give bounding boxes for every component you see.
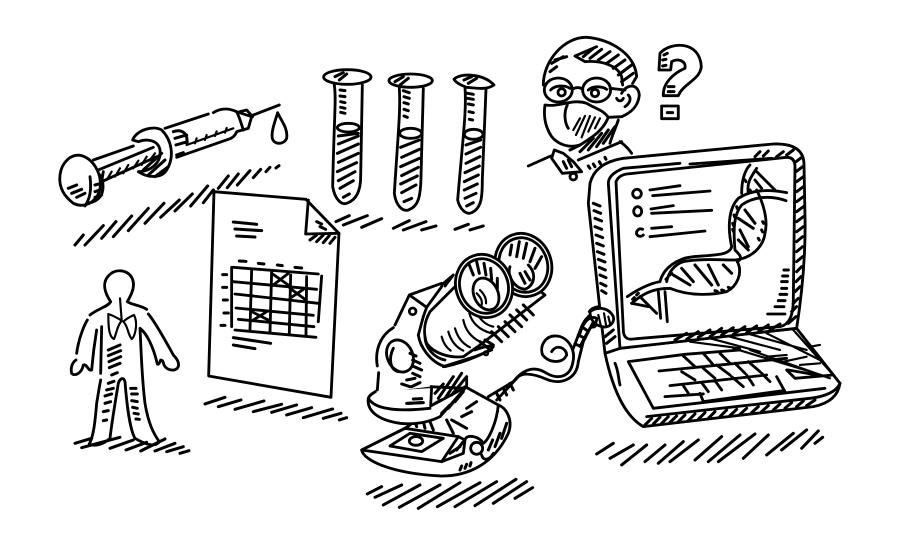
- icon: water drop: [272, 113, 287, 143]
- icon: human body with lungs: [71, 271, 189, 453]
- table grid: [232, 267, 322, 337]
- panel: medical document: [205, 192, 347, 420]
- syringe shadow: [75, 166, 279, 245]
- test tube shadow: [336, 216, 483, 230]
- syringe plunger rod: [93, 146, 157, 182]
- icon: question mark: [659, 45, 701, 119]
- laptop hinge hatching: [690, 330, 833, 378]
- syringe flange: [133, 128, 171, 176]
- document shadow: [205, 397, 347, 420]
- person shadow: [75, 437, 189, 453]
- panel: laptop: [580, 144, 840, 465]
- microscope body and tube, zoomed coordinates: [376, 225, 561, 406]
- icon: doctor with mask: [528, 37, 639, 180]
- person outline: [71, 271, 179, 445]
- cable clamp on laptop: [590, 308, 614, 327]
- syringe barrel: [165, 109, 252, 157]
- screen list: [633, 186, 712, 237]
- test tube 3: [454, 75, 494, 213]
- test tube 2: [389, 74, 432, 210]
- doctor hair: [543, 37, 637, 85]
- laptop shadow: [597, 430, 823, 465]
- laptop bezel hatching: [593, 150, 803, 343]
- microscope base: [362, 387, 510, 476]
- doctor mask: [544, 102, 608, 146]
- microscope focus knob: [381, 336, 419, 376]
- laptop screen: [616, 157, 795, 339]
- syringe needle: [253, 105, 279, 115]
- document fold: [306, 200, 339, 234]
- laptop keyboard: [628, 330, 833, 408]
- test tube 1: [324, 70, 371, 204]
- microscope collar: [418, 335, 493, 367]
- doctor glasses and eyes: [544, 78, 572, 102]
- laptop front hatching: [645, 400, 815, 425]
- screen DNA helix: [627, 165, 788, 322]
- microscope shadow: [367, 479, 533, 508]
- syringe plunger head: [60, 155, 100, 205]
- doctor ear: [608, 86, 639, 117]
- microscope foot: [368, 387, 465, 424]
- icon: microscope: [362, 225, 610, 508]
- icon: syringe: [60, 105, 279, 245]
- cable clamp: [588, 306, 610, 327]
- microscope neck hatching: [431, 378, 467, 406]
- table ticks: [221, 261, 302, 325]
- microscope cable: [488, 315, 596, 400]
- microscope tube hatching: [442, 313, 493, 351]
- doctor neck and collar: [528, 120, 632, 166]
- icon: test tubes: [324, 70, 494, 230]
- document sheet: [209, 192, 339, 397]
- right eyepiece: [486, 225, 561, 305]
- document header text lines: [233, 222, 262, 237]
- person lungs: [108, 298, 136, 339]
- document footer text lines: [233, 338, 271, 349]
- person body hatching: [103, 345, 139, 421]
- laptop base: [605, 328, 840, 427]
- laptop lid: [588, 144, 805, 353]
- table crossed cells: [252, 273, 305, 320]
- left eyepiece: [447, 246, 521, 326]
